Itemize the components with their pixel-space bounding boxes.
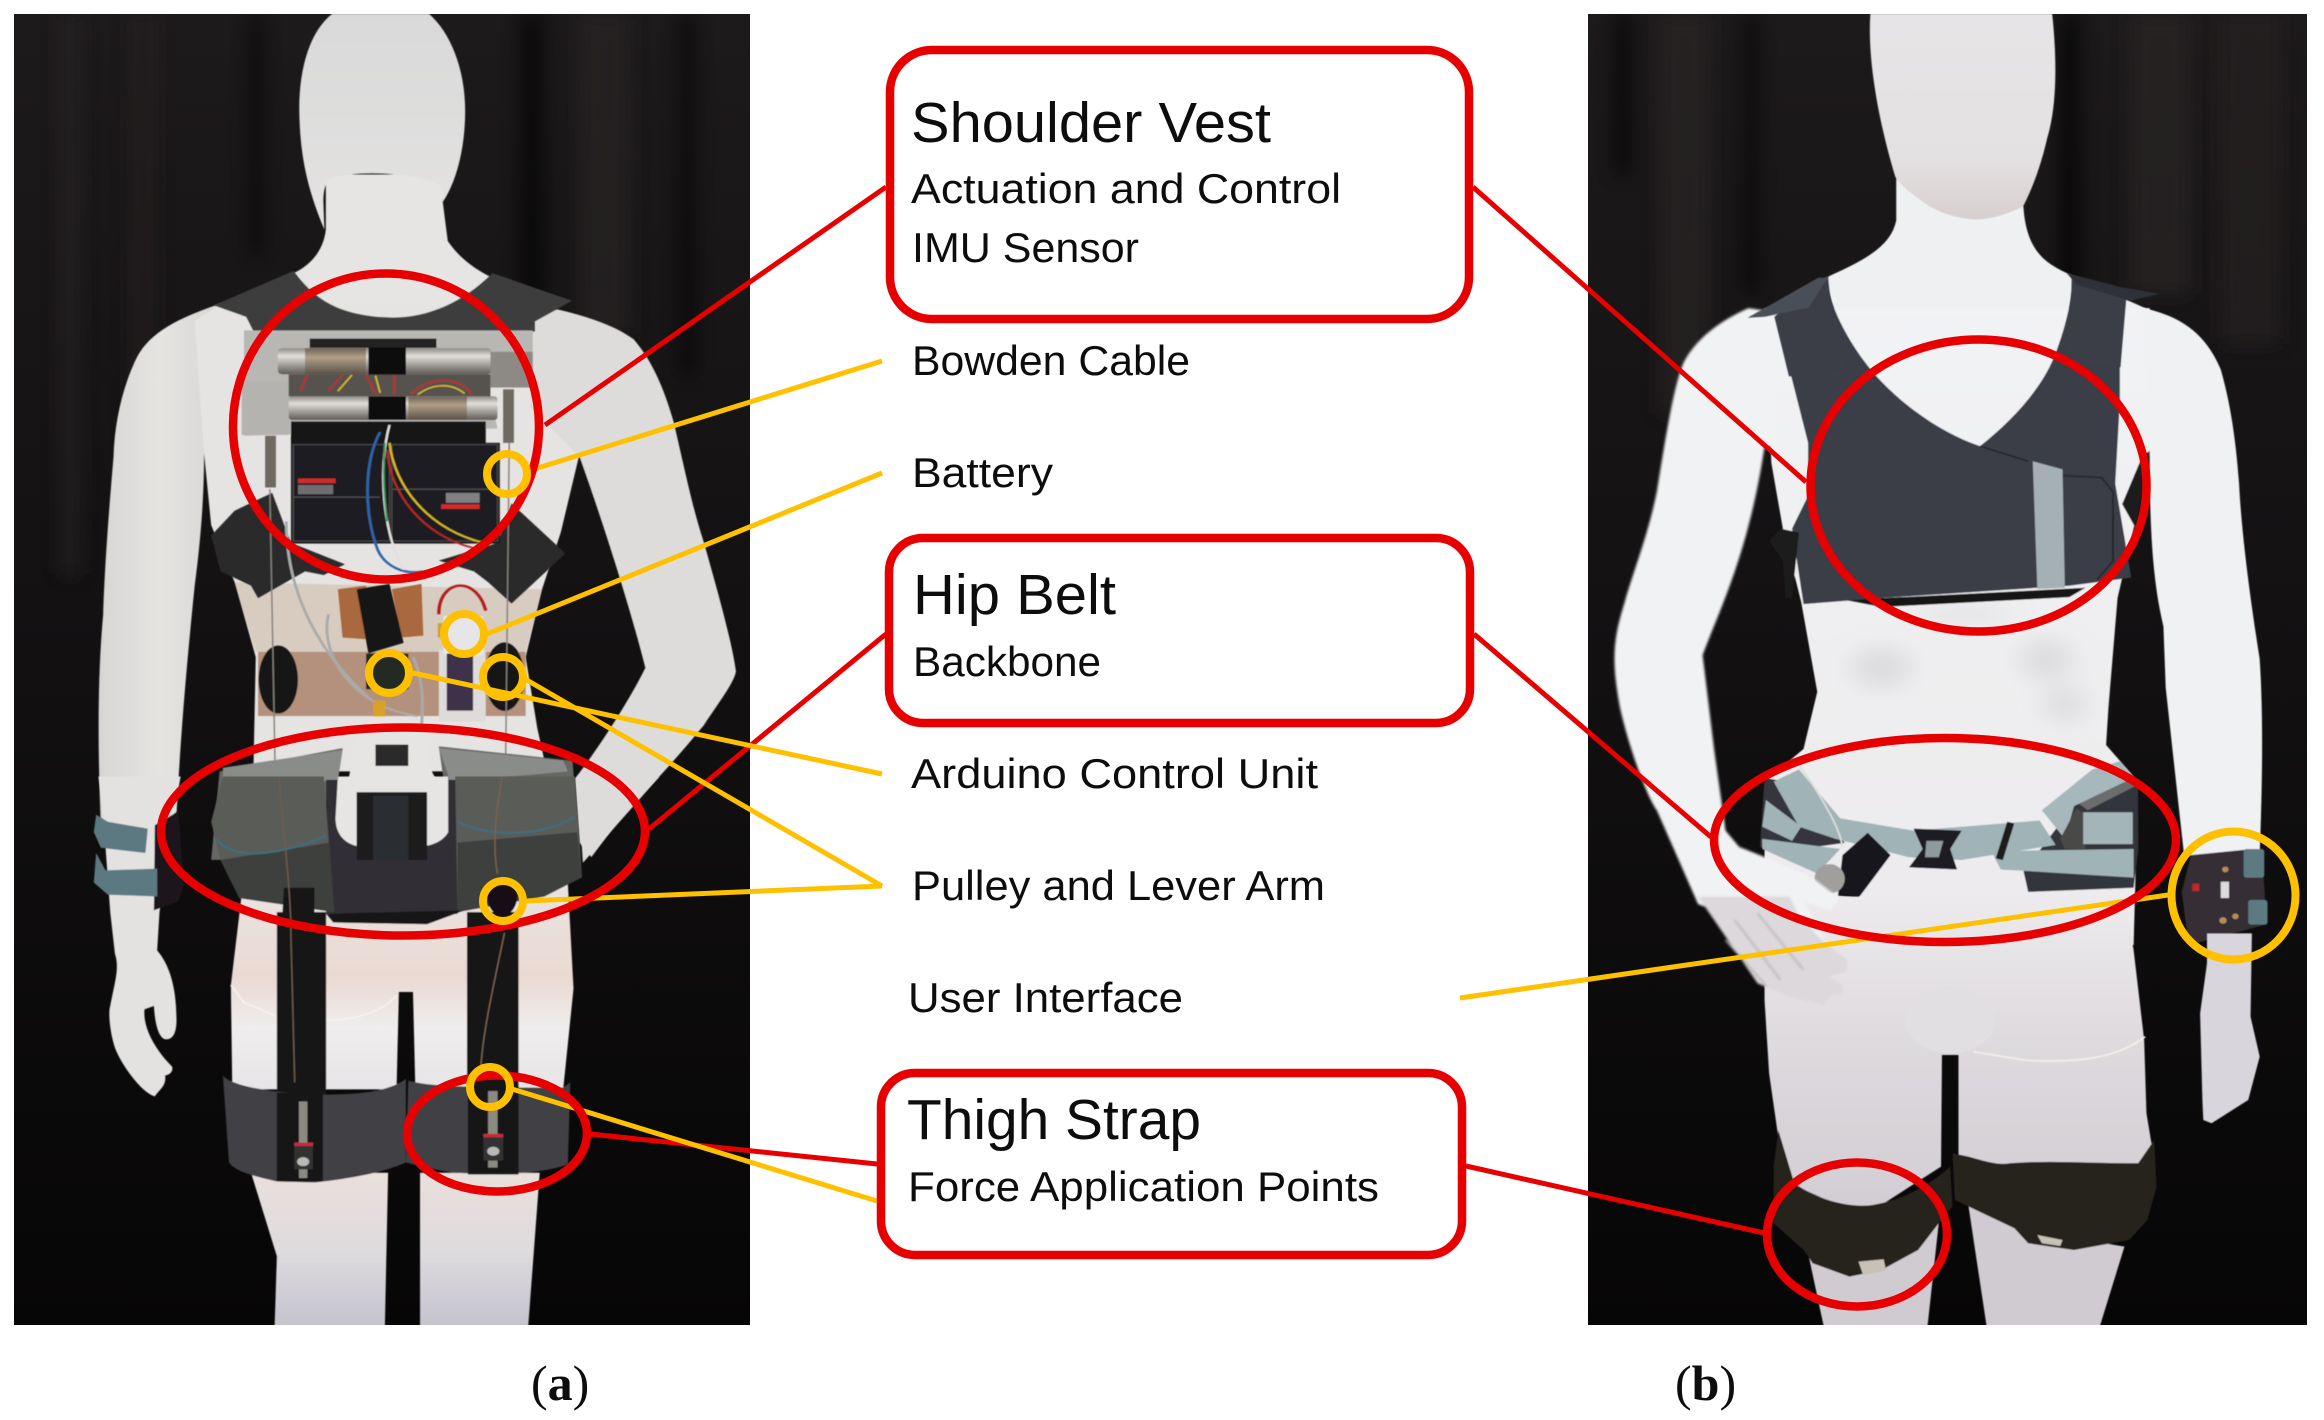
rods <box>265 436 276 487</box>
curtain background <box>1588 14 2307 1325</box>
back plate <box>348 732 436 778</box>
label: User Interface: User Interface <box>908 974 1183 1021</box>
label: Battery: Battery <box>912 449 1053 496</box>
callout: shoulder vest: IMU Sensor <box>912 224 1139 271</box>
copper base plate <box>258 652 526 716</box>
lower legs <box>251 1173 540 1329</box>
callout: shoulder vest: Shoulder Vest <box>911 91 1271 155</box>
caption (a): (a) <box>531 1355 589 1411</box>
wrist straps <box>94 811 184 910</box>
callout: hip belt: Backbone <box>913 638 1101 685</box>
groin form and seam <box>1973 1036 2146 1062</box>
mannequin hips and legs <box>1765 897 2260 1328</box>
callout: shoulder vest: Actuation and Control <box>911 165 1341 212</box>
red highlight circles <box>161 274 2176 1306</box>
upper arm <box>1614 308 1839 945</box>
mannequin lower body <box>94 777 659 1329</box>
vest shoulder straps and flaps <box>1748 273 2159 376</box>
left arm and hand <box>1614 308 1847 1005</box>
red connector lines <box>545 187 1806 1233</box>
forearm and hand <box>98 777 181 1096</box>
vest <box>1769 292 2150 607</box>
wiring between motors <box>300 375 472 395</box>
thin cables <box>268 442 510 761</box>
callout: hip belt: Hip Belt <box>913 563 1116 627</box>
label: Arduino Control Unit: Arduino Control Unit <box>911 750 1318 797</box>
motor lower <box>242 381 497 435</box>
thigh straps <box>223 1075 570 1183</box>
abdomen shading <box>1853 640 2084 718</box>
right forearm and hand <box>2200 933 2260 1123</box>
lower legs <box>1808 1207 2124 1328</box>
thigh vertical straps <box>277 912 519 1096</box>
callout: hip belt <box>889 538 1470 723</box>
curtain background <box>14 14 750 1325</box>
mannequin torso and arms <box>99 304 736 857</box>
yellow connector lines <box>413 361 2168 1201</box>
panel: photo (a) mannequin back view <box>14 14 750 1329</box>
mannequin head and neck <box>294 14 490 304</box>
mannequin neck and head <box>1824 14 2152 311</box>
yellow highlight circles <box>369 454 2296 1107</box>
callout: thigh strap <box>881 1073 1462 1255</box>
caption (b): (b) <box>1675 1355 1736 1411</box>
hips and thighs <box>231 884 574 1089</box>
controllers <box>291 421 500 572</box>
shoulder straps <box>214 271 572 331</box>
fingers <box>1698 897 1847 1005</box>
back-mounted actuation unit <box>211 330 580 860</box>
right hand on hip <box>577 777 659 863</box>
motor upper <box>278 347 533 387</box>
user interface device <box>2182 849 2267 945</box>
hip belt <box>211 777 582 1082</box>
label: Pulley and Lever Arm: Pulley and Lever Arm <box>912 862 1325 909</box>
callout: thigh strap: Thigh Strap <box>907 1088 1201 1152</box>
side pads <box>211 493 566 604</box>
callout: shoulder vest <box>890 50 1469 319</box>
aluminium plate <box>244 330 533 436</box>
electronics <box>258 520 524 724</box>
mannequin torso and arms <box>1760 292 2267 945</box>
callout: thigh strap: Force Application Points <box>908 1163 1379 1210</box>
hip bags upper <box>211 746 580 860</box>
label: Bowden Cable: Bowden Cable <box>912 337 1190 384</box>
panel: photo (b) mannequin front view <box>1588 14 2307 1328</box>
belt <box>1760 761 2138 898</box>
thigh straps <box>1774 1130 2157 1277</box>
